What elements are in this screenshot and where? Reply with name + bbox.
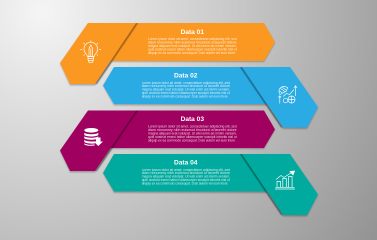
text block: data 03 (148, 125, 237, 142)
seam shadow (95, 110, 138, 171)
panel: data 01 (60, 23, 275, 86)
text block: data 01: quis nostrud exerci tation ullamcorper suscipit lobortis nisl ut (148, 47, 237, 51)
body: magenta (105, 110, 275, 148)
seam shadow (240, 154, 283, 215)
panel: data 03 (60, 110, 275, 172)
tab: magenta (60, 110, 136, 171)
text block: data 04 (142, 168, 230, 185)
text block: data 01: magna aliquam erat volutpat. Ut wisi enim ad minim veniam, (148, 44, 237, 48)
text block: data 01: aliquip ex ea commodo consequat. Duis autem vel eum iriure (148, 51, 235, 55)
text block: data 02: diam nonummy nibh euismod tincidunt ut laoreet dolore (142, 84, 230, 88)
text block: data 04: magna aliquam erat volutpat. Ut wisi enim ad minim veniam, (142, 175, 230, 179)
panel shadow (60, 24, 275, 86)
tab: blue (242, 67, 318, 128)
text block: data 04: quis nostrud exerci tation ullamcorper suscipit lobortis nisl ut (142, 178, 230, 182)
heading: data 01: Data 01 (181, 29, 204, 36)
heading: data 04: Data 04 (174, 160, 198, 166)
text block: data 03: aliquip ex ea commodo consequat. Duis autem vel eum iriure (148, 138, 235, 142)
seam shadow (240, 67, 283, 128)
text block: data 03: diam nonummy nibh euismod tincidunt ut laoreet dolore (148, 128, 237, 132)
tab: orange (60, 23, 136, 84)
panel shadow (103, 68, 318, 129)
text block: data 03: magna aliquam erat volutpat. Ut wisi enim ad minim veniam, (148, 132, 237, 136)
body: orange (105, 23, 275, 61)
icon: database download (84, 128, 103, 146)
text block: data 04: diam nonummy nibh euismod tincidunt ut laoreet dolore (142, 171, 230, 175)
text block: data 02: aliquip ex ea commodo consequat. Duis autem vel eum iriure (142, 94, 228, 98)
heading: data 02: Data 02 (174, 72, 198, 80)
text block: data 03: Lorem ipsum dolor sit amet, consectetuer adipiscing elit, sed (148, 125, 237, 129)
icon: growth chart (275, 171, 295, 189)
seam shadow (95, 23, 138, 84)
text block: data 01: Lorem ipsum dolor sit amet, consectetuer adipiscing elit, sed (148, 37, 237, 41)
text block: data 01 (148, 37, 237, 55)
text block: data 02: Lorem ipsum dolor sit amet, consectetuer adipiscing elit, sed (142, 81, 230, 85)
text block: data 04: Lorem ipsum dolor sit amet, consectetuer adipiscing elit, sed (142, 168, 230, 172)
body: blue (103, 67, 275, 104)
text block: data 02: quis nostrud exerci tation ullamcorper suscipit lobortis nisl ut (142, 91, 230, 95)
panel shadow (103, 155, 318, 216)
text block: data 03: quis nostrud exerci tation ullamcorper suscipit lobortis nisl ut (148, 135, 237, 139)
text block: data 02 (142, 81, 230, 98)
text block: data 01: diam nonummy nibh euismod tincidunt ut laoreet dolore (148, 41, 237, 45)
text block: data 04: aliquip ex ea commodo consequat. Duis autem vel eum iriure (142, 181, 228, 185)
icon: light bulb (80, 40, 101, 63)
panel shadow (60, 112, 275, 172)
text block: data 02: magna aliquam erat volutpat. Ut wisi enim ad minim veniam, (142, 88, 230, 92)
body: teal (103, 154, 275, 192)
panel: data 04 (103, 154, 318, 216)
icon: analytics circle (278, 86, 297, 104)
heading: data 03: Data 03 (181, 116, 204, 123)
tab: teal (242, 154, 318, 215)
panel: data 02 (103, 67, 318, 129)
